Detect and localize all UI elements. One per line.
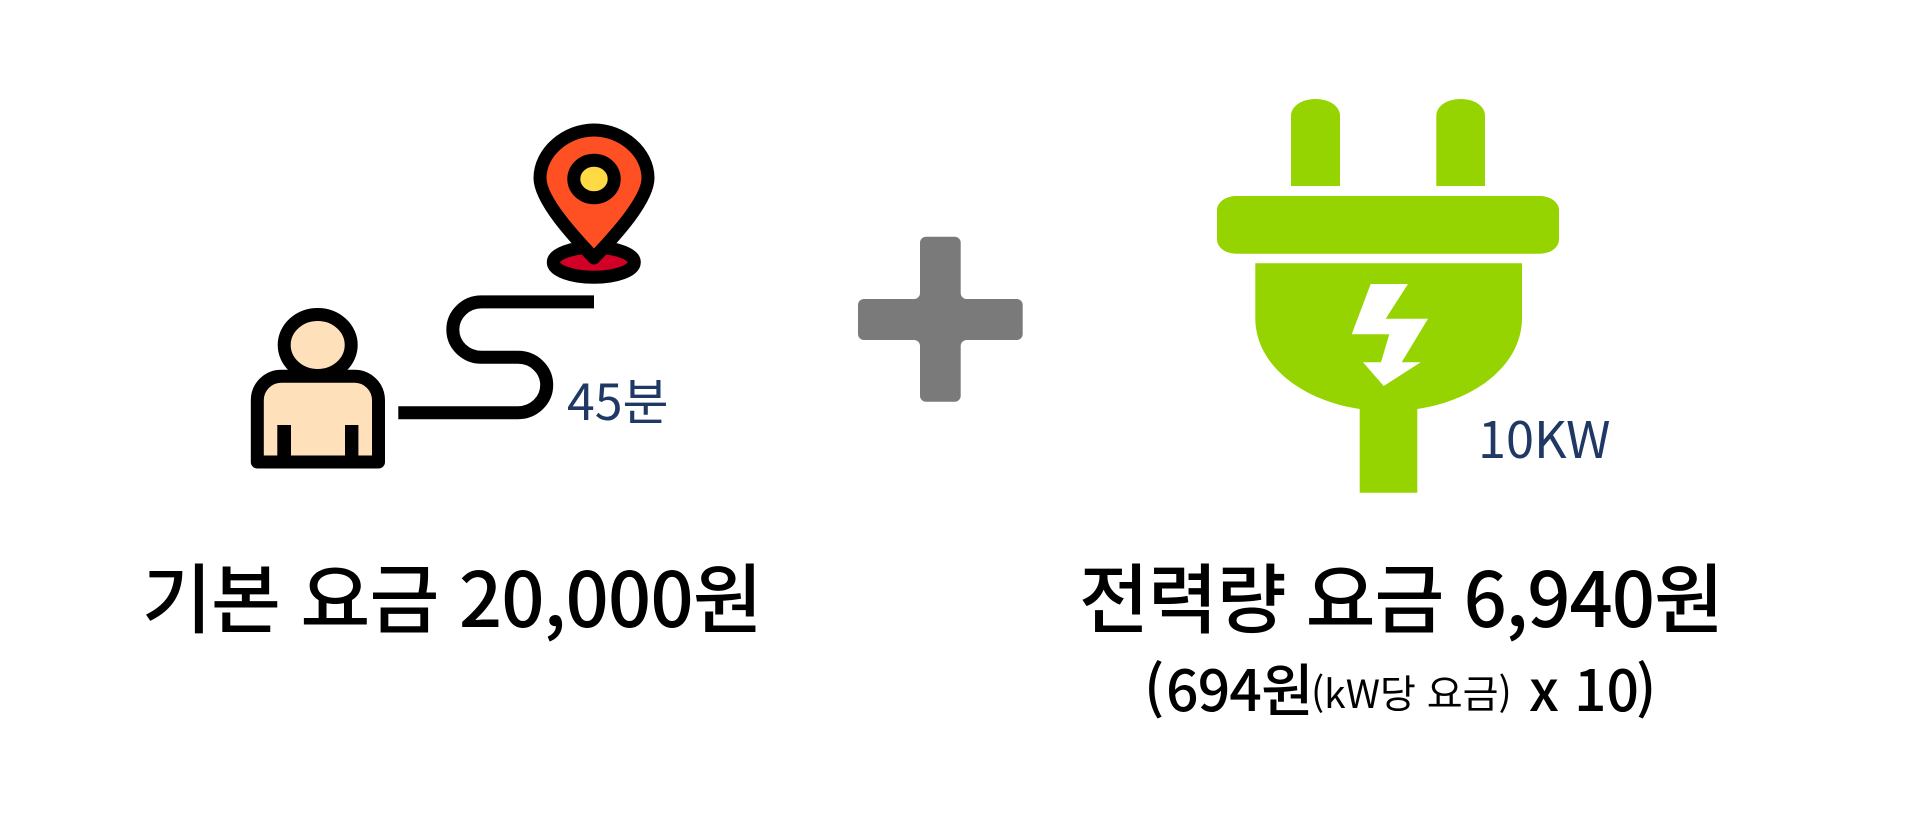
icon: lightning bolt — [1352, 284, 1428, 386]
formula: energy fee calculation: 694원 — [1166, 646, 1313, 728]
icon: location pin — [540, 130, 648, 277]
formula: energy fee calculation — [1144, 646, 1656, 728]
formula: energy fee calculation: x — [1529, 646, 1559, 728]
route line — [398, 302, 594, 413]
plus icon — [858, 237, 1023, 402]
formula: energy fee calculation: ) — [1636, 646, 1656, 728]
heading: energy fee: 전력량 요금 6,940원 — [1079, 539, 1723, 649]
label: power: 10KW — [1478, 399, 1610, 473]
formula: energy fee calculation: ( — [1144, 646, 1164, 728]
formula: energy fee calculation: (kW당 요금) — [1311, 664, 1512, 720]
formula: energy fee calculation: 10 — [1574, 646, 1639, 728]
label: travel time: 45분 — [567, 363, 668, 435]
icon: electric plug — [1217, 99, 1559, 493]
icon: person — [257, 314, 378, 462]
heading: base fee: 기본 요금 20,000원 — [142, 539, 762, 649]
